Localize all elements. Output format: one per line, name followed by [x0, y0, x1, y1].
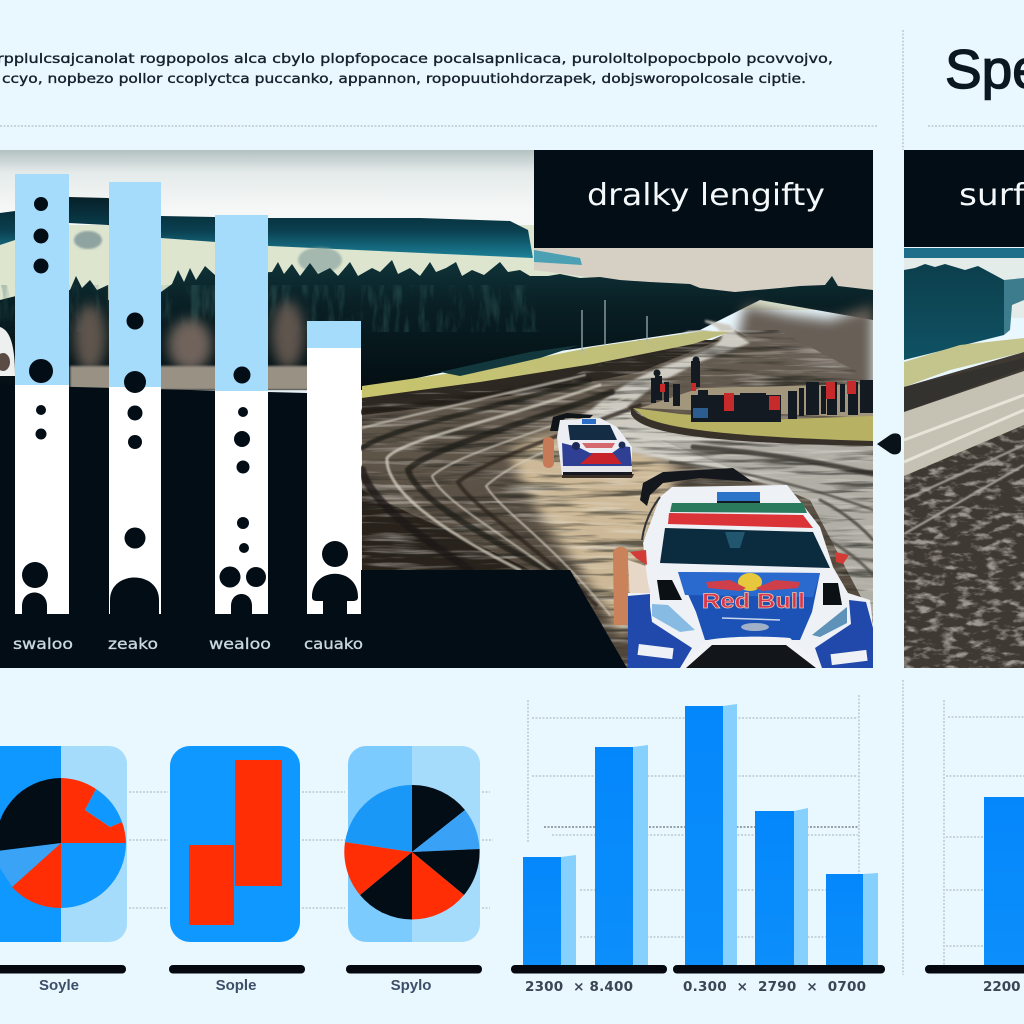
photo: forest [904, 264, 1004, 360]
bar: wealoo [215, 215, 268, 614]
photo: dark earth lower left [362, 490, 530, 570]
photo: beige plain right [534, 248, 873, 292]
marker: panel pointer [877, 433, 901, 454]
photo: sky [0, 150, 534, 225]
photo: dry grass strip [70, 366, 310, 390]
bar: cauako [307, 321, 361, 614]
photo: teal strip [904, 248, 1024, 259]
photo: blue shade on verge [440, 345, 580, 376]
Red Bull lettering: Red Bull [702, 590, 805, 613]
column 6 [984, 797, 1024, 966]
card: pie chart two [344, 746, 480, 942]
photo: white car fragment [0, 327, 15, 376]
photo: light gravel road [578, 318, 774, 486]
photo: grass verge [904, 338, 1024, 387]
axis values left: 2300 × 8.400 [525, 979, 633, 995]
title box: dralky lengifty [534, 150, 873, 248]
column 4 [755, 808, 808, 966]
card: stepped bars [170, 746, 300, 942]
photo: distant tree line [0, 197, 533, 258]
large rally car [613, 468, 873, 668]
photo: teal plain patch [534, 250, 582, 265]
column 3 [685, 704, 737, 966]
photo: road texture [362, 330, 873, 670]
bar label: wealoo: wealoo [209, 635, 271, 653]
photo: forest with jagged tree tops [0, 260, 873, 390]
bar: zeako [109, 182, 161, 614]
pie two slices [344, 785, 480, 920]
red band [668, 513, 813, 528]
side window line [642, 497, 660, 540]
photo: bare brown trees left [74, 301, 304, 372]
photo: road right lower [660, 440, 873, 620]
Ford oval [741, 623, 769, 631]
rear spoiler [640, 468, 753, 506]
photo: white field [904, 258, 1024, 318]
bar label: cauako: cauako [304, 635, 363, 653]
small rally car [543, 413, 634, 478]
title box: surf: surf [959, 178, 1024, 213]
photo: bare trees right [731, 300, 873, 385]
bar label: zeako: zeako [108, 635, 158, 653]
photo: ground and road [362, 330, 873, 668]
bar chart gridlines [528, 695, 1024, 965]
photo: ruts [904, 445, 1024, 534]
column 2 [595, 745, 648, 966]
panel: main rally photo [0, 150, 873, 670]
photo: field tree clump [74, 231, 102, 249]
photo: pasture behind crowd [640, 384, 873, 418]
caption: Sople: Sople [216, 977, 256, 994]
photo: far trees and road [1004, 278, 1024, 335]
photo: spectator mound [633, 408, 873, 441]
card: pie chart one [0, 746, 127, 942]
caption: Soyle: Soyle [39, 977, 79, 994]
bar chart [523, 704, 1024, 966]
photo: dark muddy bank [362, 340, 720, 415]
intro text block: rpplulcsɑjcanolat rogpopolos alca cbylo plopfopocace pocalsapnlicaca, purololtolpopocbpolo pcovvojvo, [0, 51, 833, 67]
column 5 [826, 873, 878, 966]
dark chart base [0, 385, 627, 668]
hood highlight [678, 572, 820, 597]
air intakes [657, 580, 682, 600]
photo: light road [904, 371, 1024, 476]
mud-covered wheel [613, 547, 629, 625]
roof scoop [717, 492, 760, 501]
photo: muddy road base [904, 352, 1024, 668]
bull logo [706, 573, 800, 591]
blue fender right [815, 600, 873, 668]
photo: dark bank [904, 358, 1024, 412]
photo: curved tyre tracks [362, 375, 873, 615]
panel: second photo [904, 150, 1024, 668]
title box: surf [904, 150, 1024, 247]
photo: clods [904, 420, 1024, 668]
blue fender left [628, 594, 692, 668]
green band [670, 503, 807, 513]
intro text block: ccyo, nopbezo pollor ccoplyctca puccanko, appannon, ropopuutiohdorzapek, dobjsworopolcosale ciptie. [2, 71, 806, 87]
intro text block [0, 51, 833, 87]
pie one slices [0, 778, 126, 908]
hood line [722, 618, 780, 620]
photo: yellow grass verge [362, 331, 730, 398]
bar: swaloo [15, 174, 69, 614]
photo: crowd [651, 356, 873, 422]
grille [680, 637, 822, 668]
bar label: swaloo: swaloo [13, 635, 73, 653]
photo: road lines [904, 395, 1024, 462]
mirrors [630, 550, 647, 565]
car body [628, 485, 873, 668]
axis values right: 2200 [983, 979, 1021, 995]
column 1 [523, 855, 576, 966]
baseline bars [0, 965, 1024, 974]
axis values middle: 0.300 × 2790 × 0700 [683, 979, 866, 995]
photo: wet tan mud [510, 433, 680, 640]
photo: pale fields [0, 225, 873, 310]
hood [678, 572, 820, 640]
title box: dralky lengifty: dralky lengifty [587, 178, 825, 213]
headlights [652, 604, 695, 632]
card grid connector lines [129, 792, 493, 908]
side stickers [638, 644, 674, 659]
caption: Spylo: Spylo [391, 977, 431, 994]
white side panel [628, 560, 650, 593]
photo: roadside poles [582, 300, 647, 353]
windscreen [660, 528, 830, 568]
